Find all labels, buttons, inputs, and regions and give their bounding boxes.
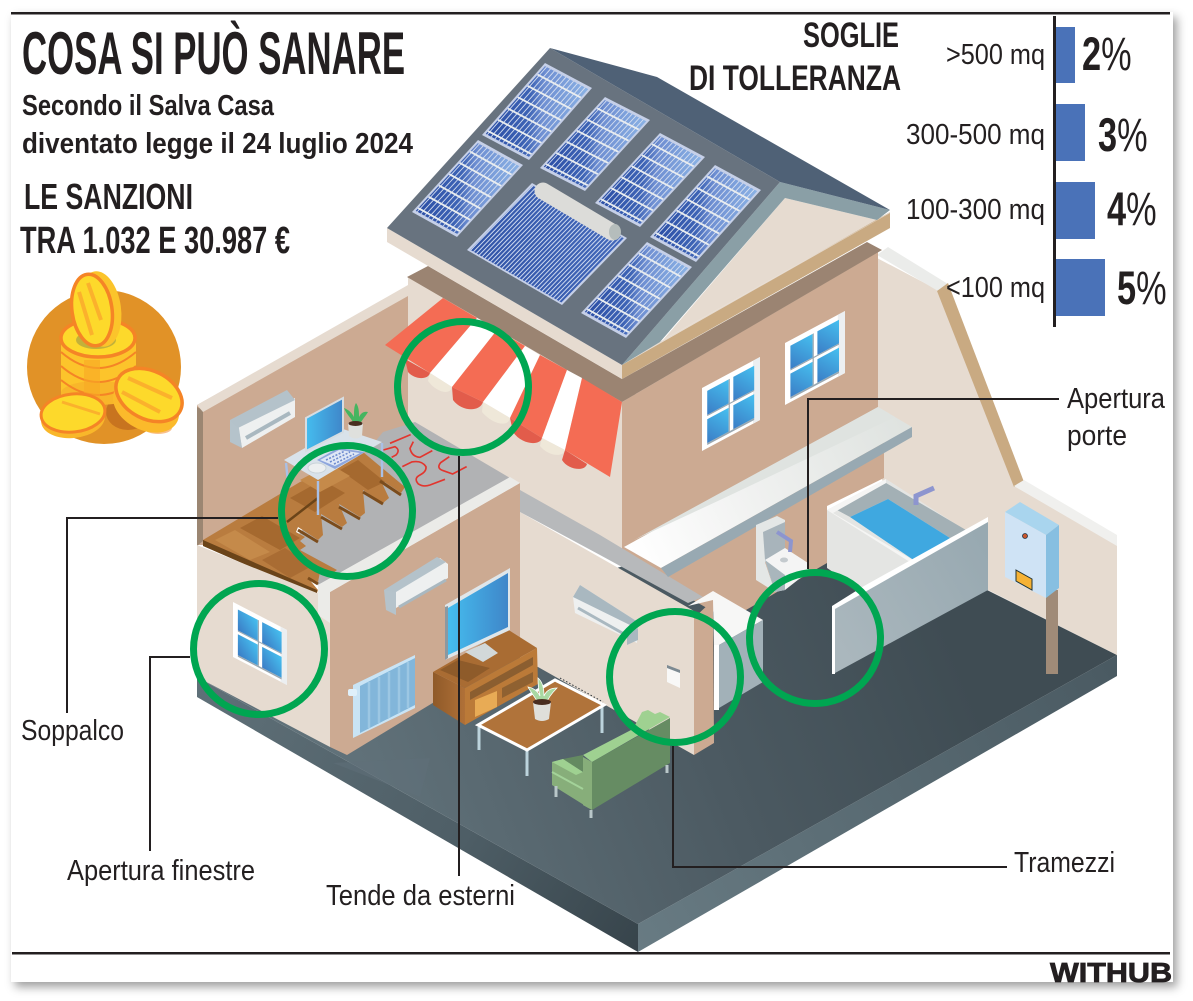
sanctions text: LE SANZIONI — [24, 176, 193, 217]
upper storey front wall — [408, 277, 622, 550]
thresholds heading: DI TOLLERANZA — [689, 59, 901, 98]
lower side wall with window — [197, 545, 330, 747]
upper air conditioner — [230, 390, 295, 448]
mezzanine back wall — [197, 285, 408, 546]
television — [445, 568, 510, 662]
subtitle: Secondo il Salva Casa — [22, 90, 275, 122]
coffee table — [478, 678, 604, 776]
bath tank — [827, 479, 988, 674]
wash basin — [756, 516, 808, 592]
exterior shelf — [624, 407, 912, 577]
wall boiler — [1005, 502, 1059, 674]
bar chart: soglie di tolleranza — [906, 16, 1167, 327]
label: apertura porte — [1067, 383, 1166, 452]
right side wall — [877, 247, 1117, 655]
subtitle — [22, 90, 413, 160]
bar: 300-500 mq: 3% — [1098, 109, 1148, 161]
striped awning — [385, 298, 622, 477]
roof — [387, 48, 890, 402]
bar: 300-500 mq — [906, 104, 1148, 161]
bar: 100-300 mq — [906, 182, 1157, 239]
bar: 100-300 mq: 4% — [1107, 183, 1157, 235]
third air conditioner — [573, 585, 638, 645]
lower side window — [233, 602, 287, 685]
leader: tramezzi — [673, 746, 1007, 867]
desk with computer — [284, 398, 382, 515]
solar panels — [412, 63, 761, 338]
title: COSA SI PUÒ SANARE — [22, 20, 405, 87]
leader: apertura porte — [808, 399, 1059, 569]
label: tramezzi: Tramezzi — [1014, 847, 1115, 879]
label: apertura finestre: Apertura finestre — [67, 855, 255, 887]
wooden mezzanine floor — [203, 452, 405, 596]
highlight circle: finestre — [194, 584, 324, 714]
bar: 300-500 mq: 300-500 mq — [906, 119, 1045, 151]
credit: WITHUB — [1050, 957, 1172, 988]
floor slab — [197, 510, 1117, 952]
long interior wall — [520, 490, 703, 755]
sanctions text — [20, 176, 290, 262]
partition end wall — [694, 600, 714, 755]
leader: apertura finestre — [150, 657, 190, 851]
thermostat — [667, 665, 680, 688]
TV cabinet — [433, 629, 538, 725]
bar: over 500 mq — [946, 27, 1132, 83]
sanctions text: TRA 1.032 E 30.987 € — [20, 220, 290, 262]
thresholds heading: SOGLIE — [803, 16, 899, 55]
illustration: coins — [27, 268, 191, 444]
bar: 100-300 mq: 100-300 mq — [906, 194, 1045, 226]
underfloor heating — [383, 435, 467, 486]
house illustration — [197, 48, 1117, 952]
lower front wall — [318, 477, 520, 755]
leader: soppalco — [67, 518, 278, 713]
bar: under 100 mq — [946, 259, 1167, 316]
radiator — [348, 655, 415, 738]
label: apertura porte: porte — [1067, 420, 1127, 452]
white counter behind partition — [688, 591, 763, 710]
highlight circle: tende — [398, 322, 528, 452]
label: apertura porte: Apertura — [1067, 383, 1166, 415]
label: tende da esterni: Tende da esterni — [326, 880, 515, 912]
highlight circle: soppalco — [282, 446, 412, 576]
leader: tende da esterni — [458, 456, 460, 876]
thresholds heading — [689, 16, 901, 98]
bar: under 100 mq: <100 mq — [946, 272, 1045, 304]
green sofa — [552, 710, 670, 818]
potted plant — [528, 678, 557, 721]
bar: over 500 mq: >500 mq — [946, 39, 1045, 71]
mezzanine floor — [290, 422, 510, 585]
second air conditioner — [384, 557, 448, 615]
label: soppalco: Soppalco — [21, 715, 124, 747]
highlight circle: porte — [750, 572, 880, 704]
highlight circle: tramezzi — [610, 612, 740, 742]
bar: over 500 mq: 2% — [1082, 28, 1132, 80]
upper windows — [702, 311, 845, 451]
subtitle: diventato legge il 24 luglio 2024 — [22, 128, 413, 160]
top rule — [11, 12, 1170, 14]
bar: under 100 mq: 5% — [1117, 262, 1167, 314]
upper storey side wall — [622, 252, 884, 612]
bottom rule — [12, 952, 1170, 954]
